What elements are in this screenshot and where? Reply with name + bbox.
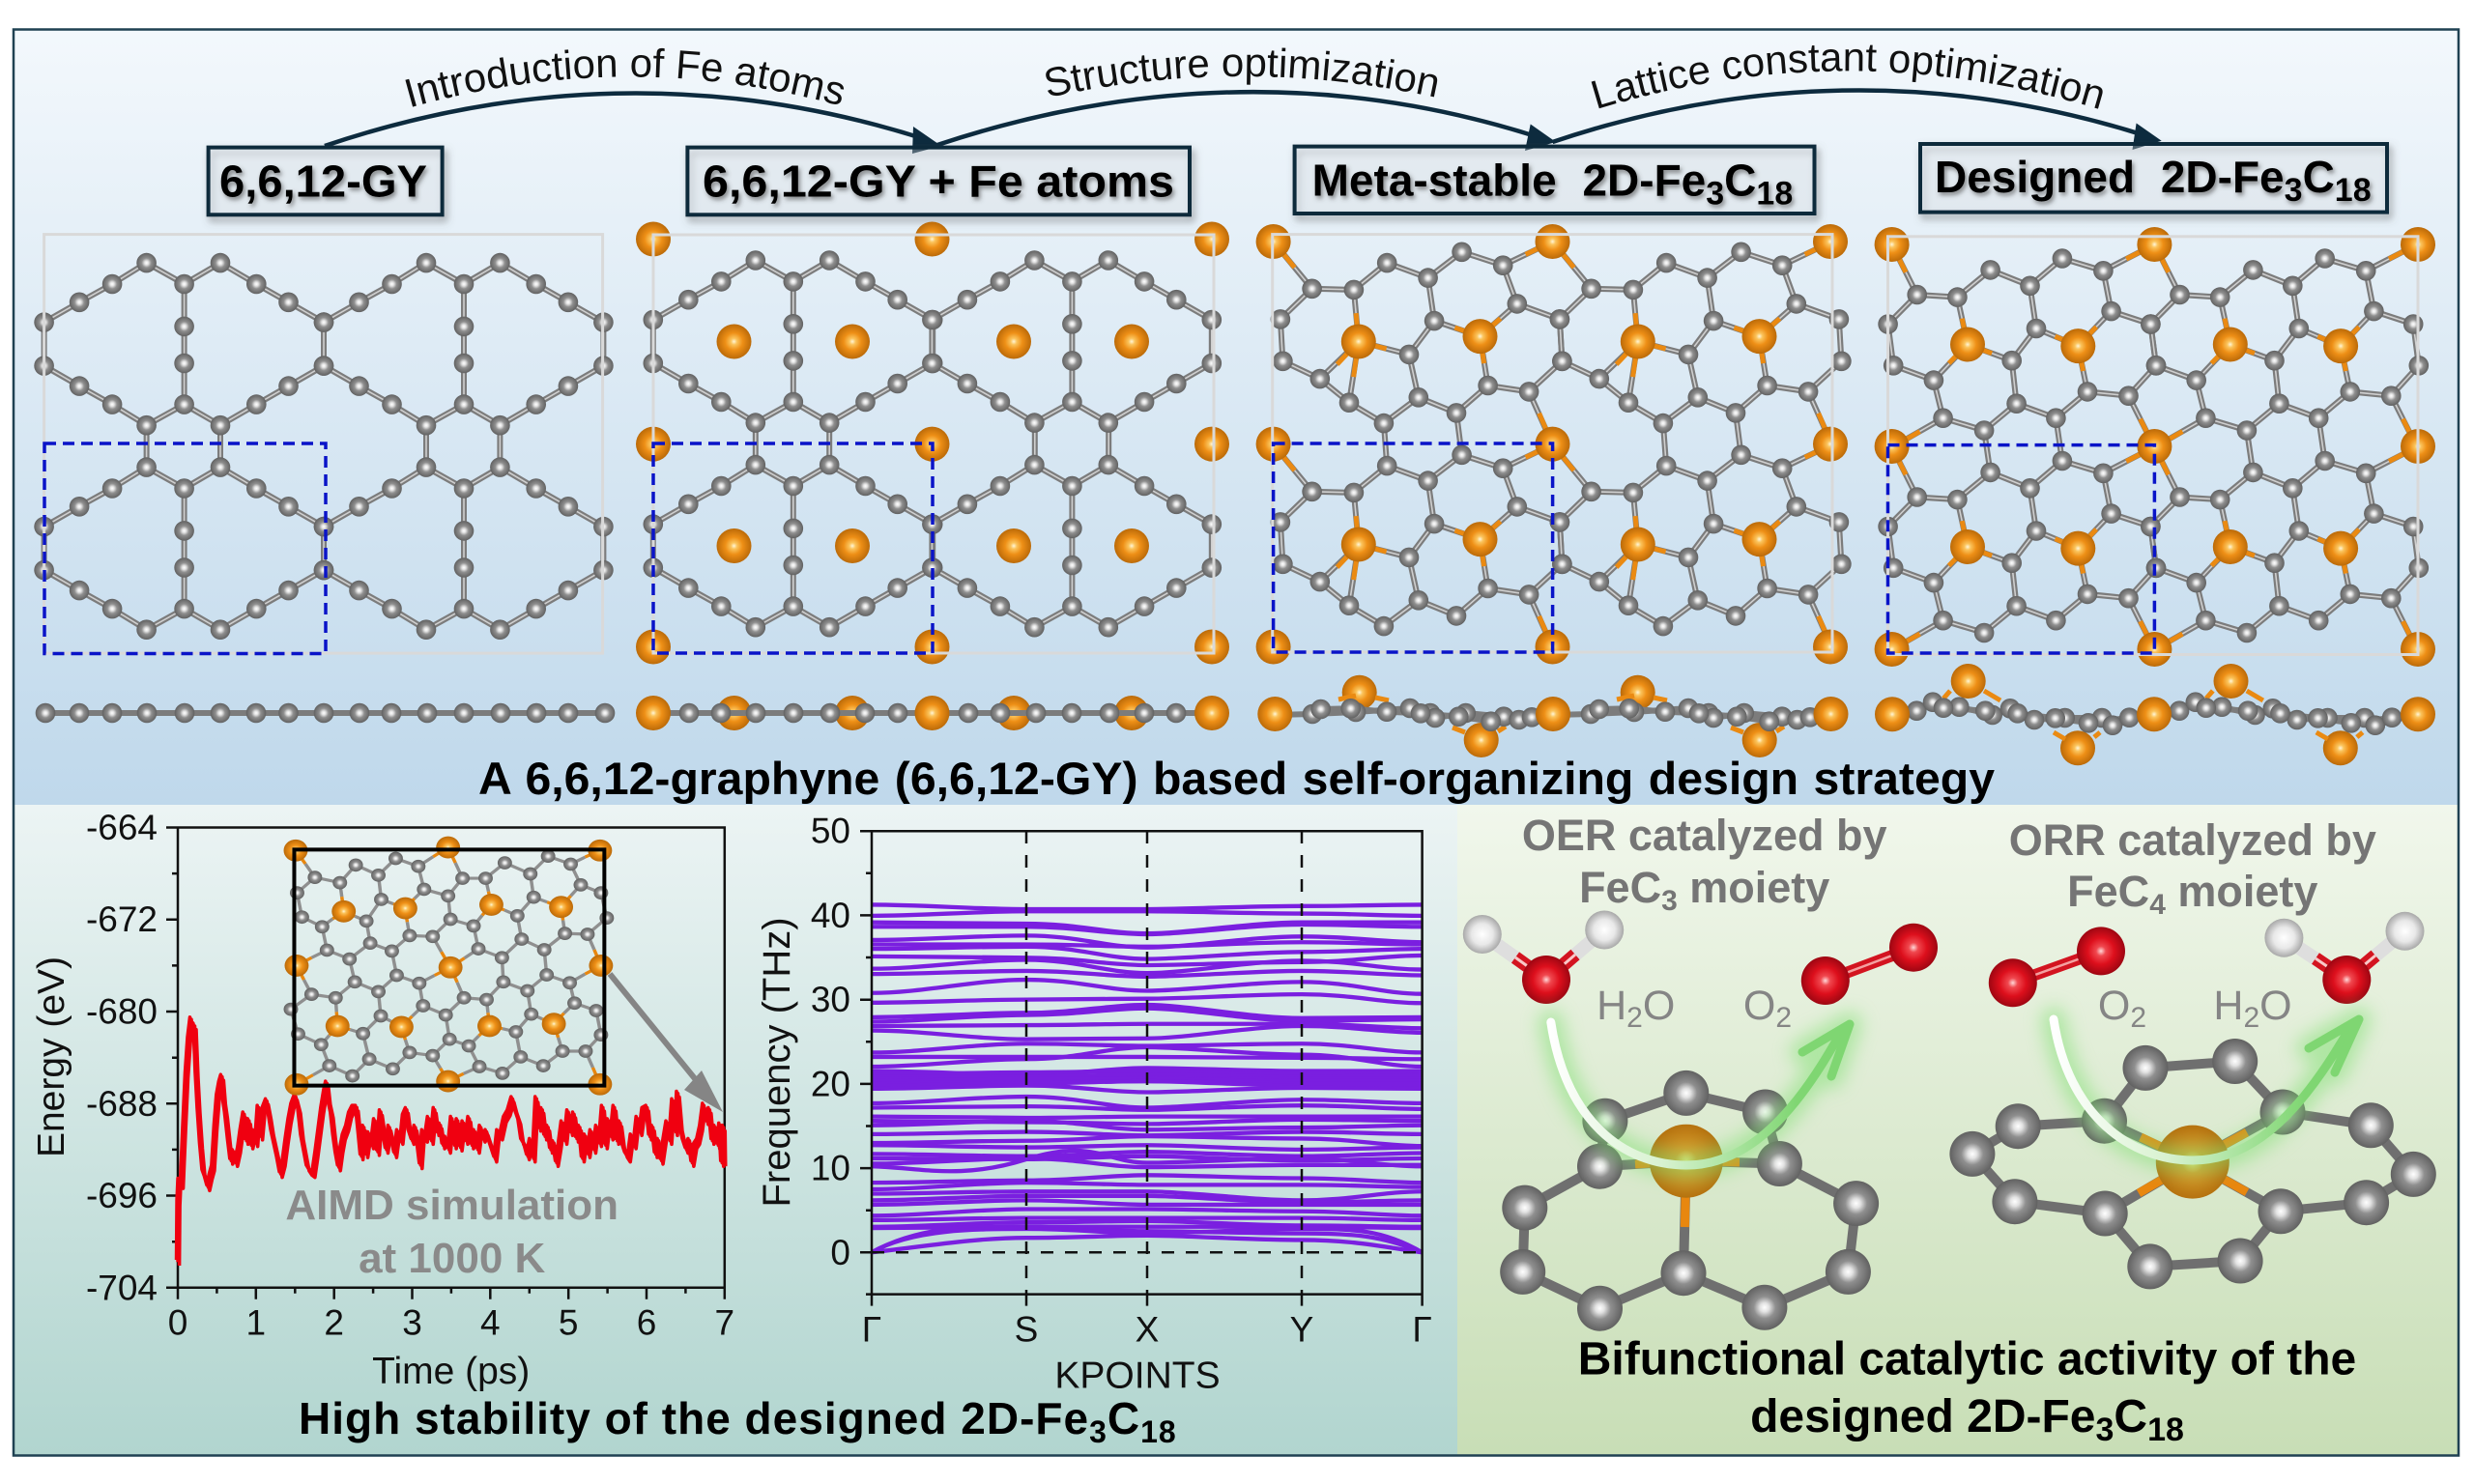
step box: 6,6,12-GY [209, 148, 443, 214]
heading: OER catalyzed by FeC3 moiety: 3 [1661, 885, 1678, 917]
heading: ORR catalyzed by FeC4 moiety: FeC [2067, 867, 2149, 916]
inset: structure after AIMD [284, 837, 614, 1096]
step box: Designed 2D-Fe3C18: Designed 2D-Fe [1935, 152, 2285, 202]
caption: high stability: C [1108, 1393, 1140, 1443]
x axis tick labels [168, 1303, 734, 1343]
arrow: structure optimization [937, 92, 1556, 151]
y axis tick labels [811, 812, 850, 1272]
x axis title: Time (ps) [372, 1351, 530, 1392]
structure: FeC3 moiety [1500, 1070, 1879, 1331]
annotation: AIMD simulation at 1000 K: AIMD simulation [285, 1182, 618, 1229]
x axis tick labels: 0 [168, 1303, 187, 1343]
molecule: oxygen left [1801, 924, 1938, 1005]
molecule labels: H [2213, 983, 2243, 1029]
k-point labels: Γ [862, 1310, 881, 1349]
molecule labels: O [1643, 983, 1675, 1029]
step box: Designed 2D-Fe3C18: C [2303, 152, 2335, 202]
chart: AIMD energy versus time [31, 808, 734, 1392]
step box: Meta-stable 2D-Fe3C18 [1295, 147, 1815, 214]
molecule labels: 2 [2243, 1002, 2259, 1034]
y axis tick labels: -664 [86, 808, 158, 847]
y axis title: Frequency (THz) [756, 917, 798, 1208]
heading: OER catalyzed by FeC3 moiety: moiety [1678, 863, 1829, 912]
structure: 6,6,12-GY + Fe atoms side view [636, 696, 1229, 730]
step box: Designed 2D-Fe3C18: 18 [2335, 172, 2372, 209]
step box: Meta-stable 2D-Fe3C18: Meta-stable 2D-Fe [1312, 155, 1706, 205]
step box: Meta-stable 2D-Fe3C18: 3 [1706, 176, 1724, 213]
k-point labels: S [1015, 1310, 1038, 1349]
caption: high stability: 3 [1089, 1414, 1108, 1449]
caption: bifunctional catalytic activity: 18 [2147, 1412, 2184, 1448]
x axis tick labels: 6 [637, 1303, 656, 1343]
y axis tick labels: -672 [86, 899, 158, 939]
y axis tick labels: 10 [811, 1149, 850, 1188]
x axis tick labels: 5 [559, 1303, 578, 1343]
x axis tick labels: 2 [324, 1303, 344, 1343]
caption: bifunctional catalytic activity: 3 [2095, 1412, 2114, 1448]
structure: designed 2D-Fe3C18 side view [1875, 664, 2435, 765]
heading: ORR catalyzed by FeC4 moiety: 4 [2149, 889, 2166, 921]
molecule: oxygen right [1989, 927, 2125, 1007]
heading: OER catalyzed by FeC3 moiety: OER catalyzed by [1522, 811, 1887, 860]
arrow: introduction of Fe atoms [325, 93, 941, 154]
molecule: water right [2264, 912, 2424, 1004]
molecule labels: O [2098, 983, 2130, 1029]
x axis tick labels: 1 [246, 1303, 266, 1343]
caption: bifunctional catalytic activity: C [2114, 1391, 2147, 1442]
arrow: ORR reaction path [2054, 1019, 2359, 1160]
caption: bifunctional catalytic activity: designed 2D-Fe [1750, 1391, 2095, 1442]
arrows and process labels [324, 44, 2162, 154]
y axis title: Energy (eV) [31, 956, 72, 1157]
caption: bifunctional catalytic activity: Bifunctional catalytic activity of the [1578, 1334, 2356, 1385]
structure: meta-stable 2D-Fe3C18 top view [1256, 224, 1852, 665]
panel: bifunctional catalysis background [1457, 805, 2459, 1455]
heading: OER catalyzed by FeC3 moiety: FeC [1579, 863, 1661, 912]
phonon bands [872, 904, 1423, 1252]
y axis tick labels [86, 808, 158, 1308]
heading: ORR catalyzed by FeC4 moiety: moiety [2166, 867, 2317, 916]
heading: design strategy: A 6,6,12-graphyne (6,6,12-GY) based self-organizing design strategy [478, 753, 1995, 804]
chart frame, ticks and dashed lines [860, 831, 1423, 1306]
x axis tick labels: 3 [402, 1303, 422, 1343]
structure: 6,6,12-GY + Fe atoms top view [636, 222, 1229, 665]
molecule: water left [1463, 910, 1624, 1004]
label: Structure optimization: Structure optimization [1046, 48, 1438, 97]
label: Introduction of Fe atoms: Introduction of Fe atoms [405, 48, 845, 107]
x axis tick labels: 7 [715, 1303, 734, 1343]
structure: designed 2D-Fe3C18 top view [1875, 227, 2435, 667]
y axis tick labels: 20 [811, 1064, 850, 1103]
annotation: AIMD simulation at 1000 K: at 1000 K [359, 1235, 546, 1282]
k-point labels: X [1136, 1310, 1159, 1349]
y axis tick labels: 30 [811, 980, 850, 1019]
y axis tick labels: 50 [811, 812, 850, 851]
y axis tick labels: -704 [86, 1268, 158, 1308]
k-point labels: Y [1290, 1310, 1313, 1349]
heading: ORR catalyzed by FeC4 moiety: ORR catalyzed by [2009, 815, 2376, 865]
molecule labels: H [1597, 983, 1626, 1029]
k-point labels: Γ [1412, 1310, 1432, 1349]
energy curve [177, 1017, 726, 1266]
y axis tick labels: -688 [86, 1084, 158, 1124]
structure: FeC4 moiety [1949, 1039, 2436, 1289]
step box: Designed 2D-Fe3C18: 3 [2285, 172, 2303, 209]
chart frame and ticks [166, 827, 725, 1299]
heading: OER catalyzed by FeC3 moiety [1522, 811, 1887, 917]
step box: 6,6,12-GY + Fe atoms: 6,6,12-GY + Fe atoms [703, 157, 1174, 207]
caption: bifunctional catalytic activity [1578, 1334, 2356, 1448]
y axis tick labels: -680 [86, 991, 158, 1032]
molecule labels: O [2259, 983, 2292, 1029]
arrow: OER reaction path [1551, 1022, 1850, 1165]
molecule labels: 2 [1626, 1002, 1643, 1034]
arrow: inset to curve [610, 974, 723, 1112]
structure: meta-stable 2D-Fe3C18 side view [1257, 675, 1848, 757]
panel: high stability background [14, 805, 1457, 1455]
molecule labels [1597, 983, 2292, 1034]
caption: high stability: High stability of the designed 2D-Fe [299, 1393, 1089, 1443]
structure: 6,6,12-GY top view [34, 235, 614, 653]
molecule labels: 2 [1775, 1002, 1792, 1034]
caption: high stability: 18 [1140, 1414, 1177, 1449]
step box: 6,6,12-GY: 6,6,12-GY [219, 157, 427, 207]
step box: Meta-stable 2D-Fe3C18: 18 [1756, 176, 1793, 213]
structure: 6,6,12-GY side view [36, 703, 615, 723]
x axis title: KPOINTS [1054, 1355, 1221, 1396]
molecule labels: O [1743, 983, 1775, 1029]
y axis tick labels: 0 [830, 1233, 850, 1272]
panel: self-organizing design strategy background [14, 30, 2459, 805]
step box: Designed 2D-Fe3C18 [1920, 144, 2387, 213]
arrow: lattice constant optimization [1552, 90, 2162, 150]
k-point labels [862, 1310, 1432, 1349]
chart: phonon dispersion [756, 812, 1432, 1396]
annotation: AIMD simulation at 1000 K [285, 1182, 618, 1282]
y axis tick labels: 40 [811, 896, 850, 935]
molecule labels: 2 [2130, 1002, 2146, 1034]
label: Lattice constant optimization: Lattice constant optimization [1591, 44, 2103, 109]
heading: ORR catalyzed by FeC4 moiety [2009, 815, 2376, 921]
y axis tick labels: -696 [86, 1176, 158, 1215]
x axis tick labels: 4 [480, 1303, 501, 1343]
step box: 6,6,12-GY + Fe atoms [687, 148, 1190, 214]
step box: Meta-stable 2D-Fe3C18: C [1724, 155, 1756, 205]
